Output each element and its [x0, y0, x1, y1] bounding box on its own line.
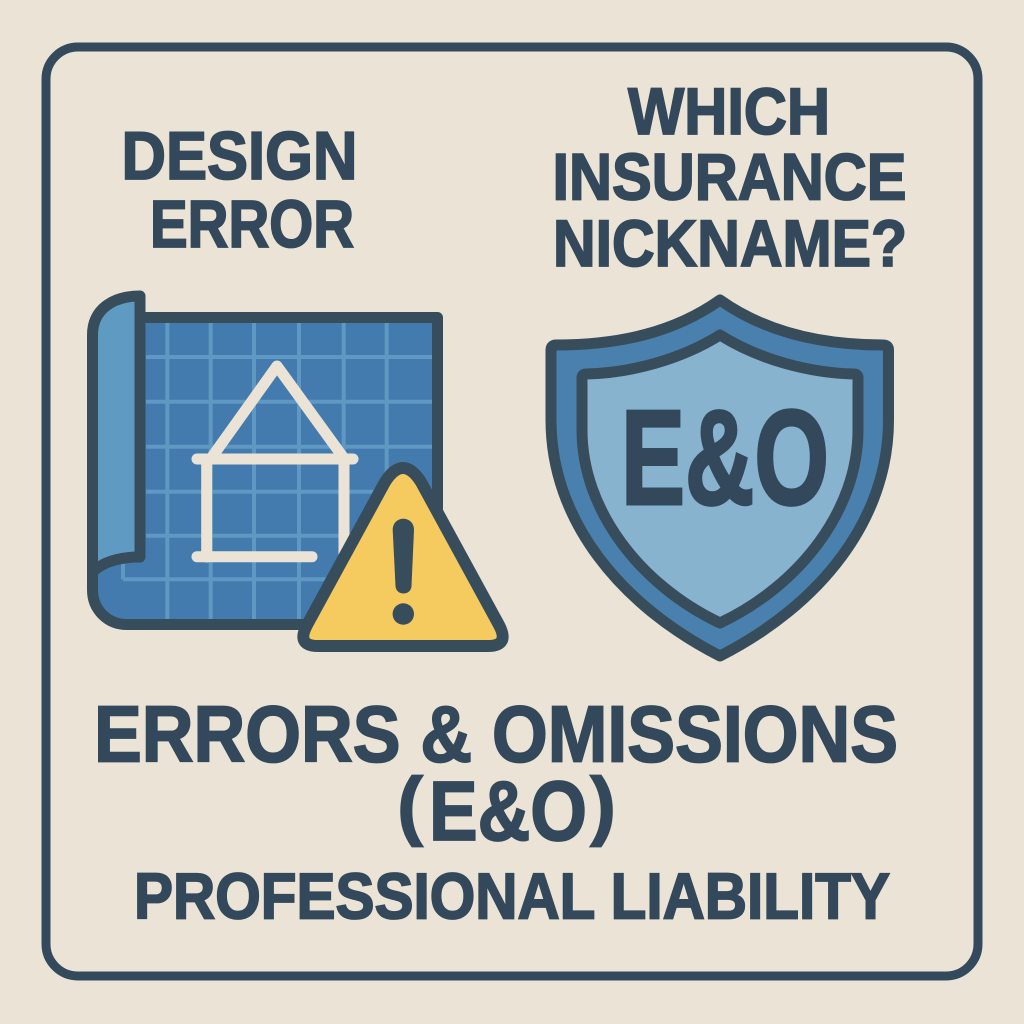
blueprint grid	[123, 323, 432, 619]
heading: design error	[122, 118, 358, 262]
title: errors and omissions: ERRORS & OMISSIONS	[94, 690, 898, 778]
heading: design error: ERROR	[150, 187, 354, 262]
icon: blueprint with house	[92, 296, 438, 624]
heading: which insurance nickname: NICKNAME?	[553, 206, 907, 280]
title: errors and omissions	[94, 690, 898, 858]
icon: shield E&O: E&O	[621, 382, 829, 533]
heading: design error: DESIGN	[122, 118, 358, 194]
blueprint roll	[92, 296, 140, 572]
icon: warning triangle	[303, 468, 503, 646]
house drawing	[197, 366, 353, 557]
title: errors and omissions: E&O	[429, 764, 587, 858]
heading: which insurance nickname	[552, 74, 907, 280]
title: errors and omissions: (	[397, 762, 423, 848]
subtitle: professional liability: PROFESSIONAL LIABILITY	[134, 860, 890, 932]
heading: which insurance nickname: WHICH	[628, 74, 830, 148]
title: errors and omissions: )	[590, 762, 616, 848]
heading: which insurance nickname: INSURANCE	[552, 140, 906, 214]
icon: shield E&O	[551, 300, 888, 656]
